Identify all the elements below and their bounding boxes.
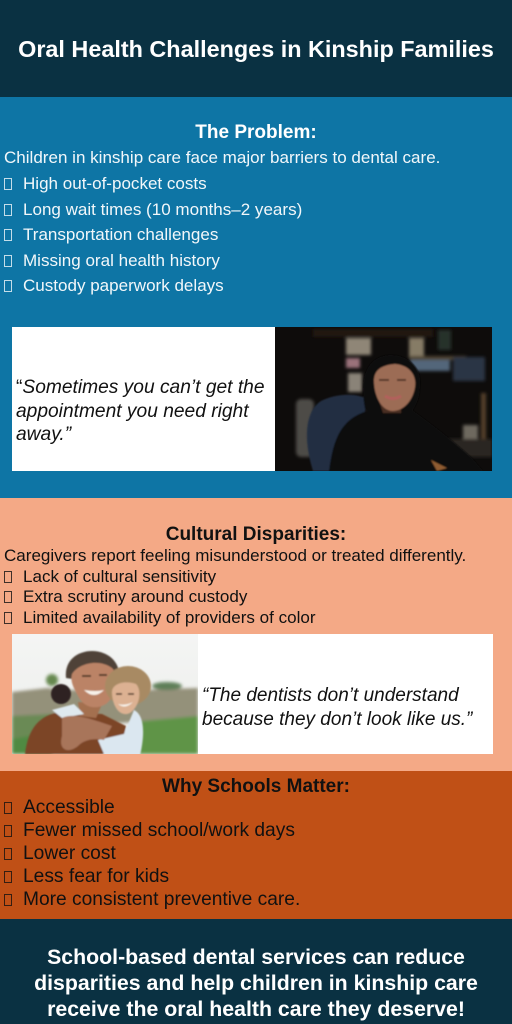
quote text: appointment you need right [16,400,249,422]
disparities list [4,567,316,627]
body [329,405,483,471]
problem list: Long wait times (10 months–2 years) [23,200,302,219]
child face [112,682,139,714]
woman hair [66,651,119,682]
disparities intro text: Caregivers report feeling misunderstood or treated differently. [4,546,466,565]
quote text: “Sometimes you can’t get the [16,377,264,398]
closing banner [0,919,512,1024]
heading: why schools matter: Why Schools Matter: [162,776,350,797]
quote text [16,377,264,445]
problem list: Missing oral health history [23,251,220,270]
neck and face [379,401,401,413]
woman body [25,712,126,754]
child hair [105,666,151,706]
woman neck [78,702,102,718]
closing message [34,945,478,1021]
problem list: Custody paperwork delays [23,276,224,295]
quote text: because they don’t look like us.” [202,708,472,730]
schools list [4,797,300,910]
hands [61,716,112,750]
hair [363,355,420,419]
title: Oral Health Challenges in Kinship Families [18,36,494,62]
problem list: High out-of-pocket costs [23,174,207,193]
closing message: receive the oral health care they deserve! [47,997,465,1021]
panel: the problem [0,97,512,498]
closing message: School-based dental services can reduce [47,945,465,969]
quote card: appointment [12,327,275,471]
photo: caregiver hugging child [12,634,198,754]
heading: the problem: The Problem: [195,122,317,143]
heading: cultural disparities: Cultural Disparities: [166,524,346,545]
problem list: Transportation challenges [23,225,218,244]
schools list: Fewer missed school/work days [23,820,295,841]
quote text [202,685,473,730]
panel: cultural disparities [0,498,512,771]
schools list: Accessible [23,797,115,818]
child hair back dark [51,684,71,704]
header band [0,0,512,97]
quote card: dentists [198,634,493,754]
disparities list: Limited availability of providers of color [23,608,316,627]
schools list: Less fear for kids [23,866,169,887]
schools list: More consistent preventive care. [23,889,300,910]
quote text: away.” [16,424,71,445]
child arm [52,704,84,718]
quote text: “The dentists don’t understand [202,685,459,706]
disparities list: Lack of cultural sensitivity [23,567,216,586]
problem intro text: Children in kinship care face major barriers to dental care. [4,148,440,167]
panel: why schools matter [0,771,512,919]
woman face [71,663,117,707]
closing message: disparities and help children in kinship care [34,971,478,995]
disparities list: Extra scrutiny around custody [23,587,247,606]
schools list: Lower cost [23,843,116,864]
problem list [4,174,302,295]
photo: older woman in dark room [275,327,492,471]
chair [307,395,367,471]
